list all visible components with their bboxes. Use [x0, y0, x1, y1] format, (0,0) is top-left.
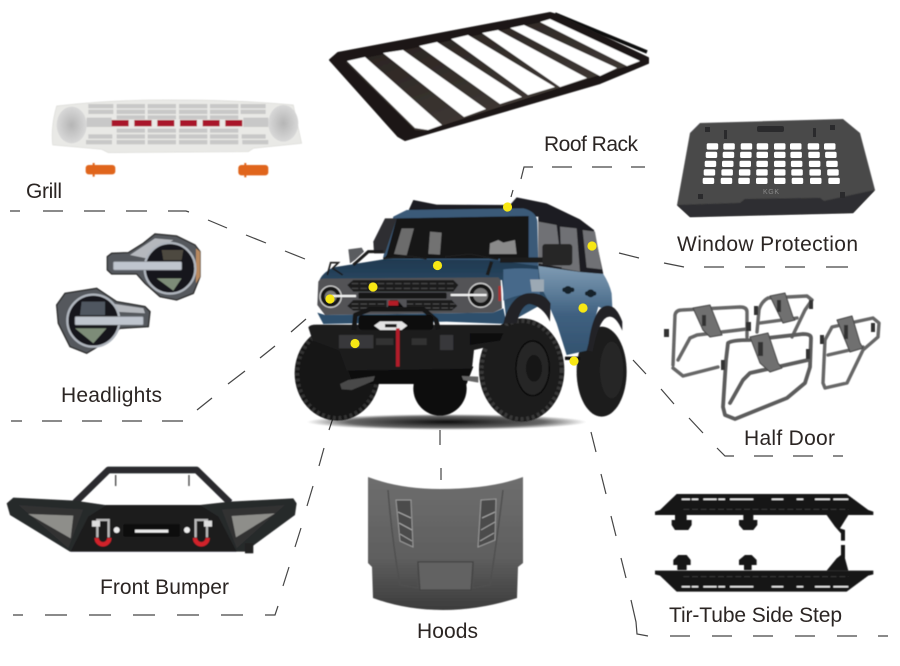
icon: orange marker lights: [86, 163, 268, 177]
arrow: grill leader line: [10, 211, 305, 259]
arrow: hoods leader line: [440, 430, 441, 480]
hood and fender: [319, 259, 548, 324]
arrow: side step leader line: [591, 432, 888, 636]
heading: front bumper label: Front Bumper: [100, 576, 229, 599]
panel: hoods: [368, 477, 523, 610]
arrow: window protection leader line: [619, 253, 848, 267]
panel: half door: [664, 293, 879, 419]
fender flares: [503, 293, 551, 323]
text: KGK logo: KGK: [763, 189, 779, 196]
winch hoop: [354, 309, 438, 330]
heading: grill label: Grill: [26, 180, 62, 203]
rear wheels: [413, 327, 627, 417]
arrow: half door leader line: [633, 360, 843, 456]
windshield: [384, 216, 529, 259]
panel: front bumper: [7, 470, 297, 553]
heading: headlights label: Headlights: [61, 384, 162, 407]
arrow: roof rack leader line: [511, 167, 645, 197]
panel: bronco vehicle: [295, 197, 627, 430]
panel: side steps: [655, 494, 873, 592]
lower blue band: [317, 308, 507, 324]
panel: grill: [52, 100, 302, 177]
front bumper on vehicle: [308, 325, 517, 371]
icon: red shackles: [92, 520, 212, 544]
ground shadow: [307, 414, 587, 430]
windshield frame: [383, 208, 538, 268]
icon: yellow marker dots: [325, 202, 597, 366]
grille: [347, 280, 458, 311]
front wheel, viewer right: [479, 318, 564, 422]
cab roof: [406, 197, 603, 274]
heading: roof rack label: Roof Rack: [544, 133, 638, 156]
heading: half door label: Half Door: [744, 427, 835, 450]
door handles: [562, 286, 596, 297]
headlights on vehicle: [320, 283, 493, 307]
side body: [538, 266, 613, 355]
panel: headlights: [57, 234, 200, 353]
heading: side step label: Tir-Tube Side Step: [669, 604, 842, 627]
panel: window protection: [677, 119, 875, 217]
lower chassis: [347, 367, 473, 384]
arrow: front bumper leader line: [13, 412, 335, 615]
panel: roof rack: [330, 13, 648, 140]
heading: hoods label: Hoods: [417, 620, 478, 643]
fascia: [317, 277, 502, 315]
front wheel, viewer left: [295, 326, 380, 421]
heading: window protection label: Window Protection: [677, 233, 858, 256]
arrow: headlights leader line: [11, 319, 306, 421]
side windows: [538, 222, 602, 272]
mirrors and snorkel: [373, 218, 397, 253]
